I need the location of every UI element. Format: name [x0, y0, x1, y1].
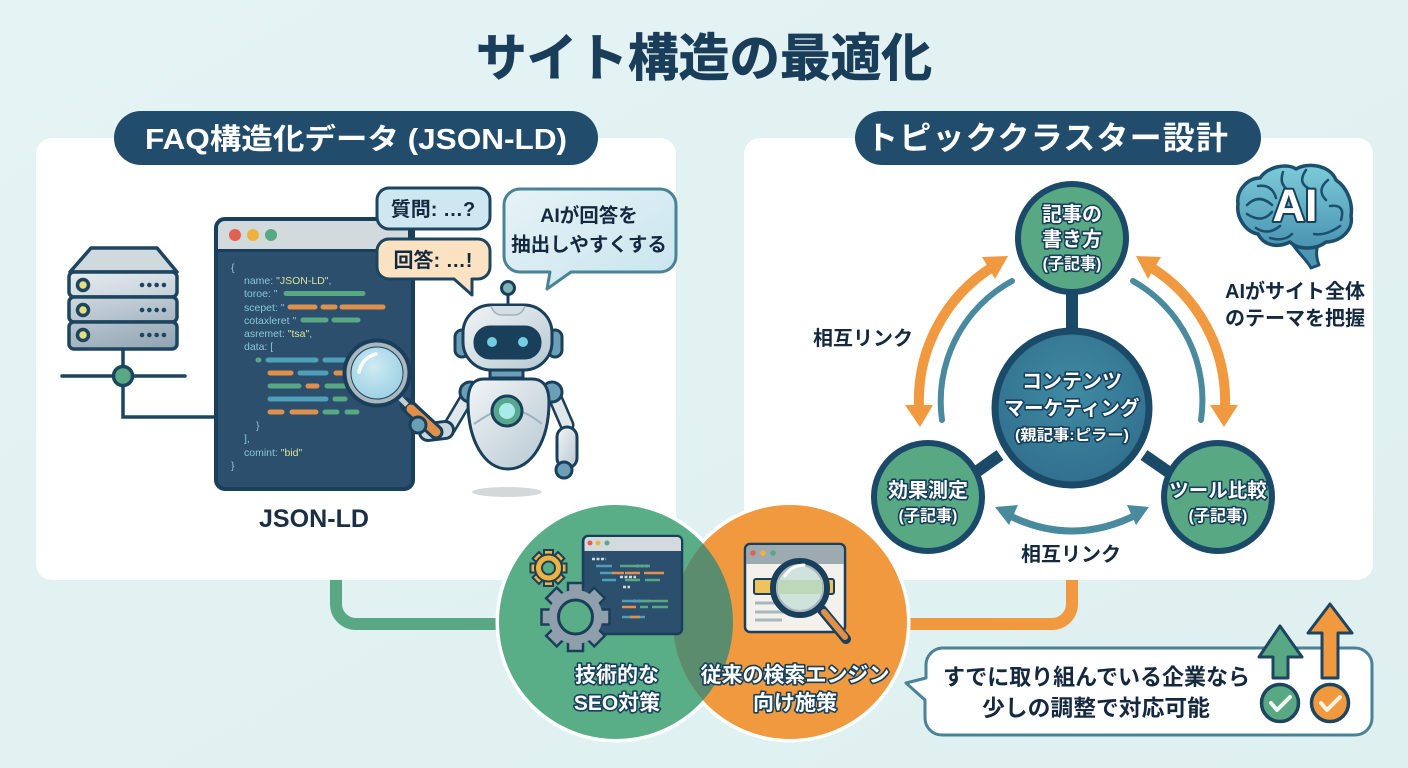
- heading pill: topic cluster: [855, 111, 1261, 165]
- panel: topic cluster design: [744, 111, 1373, 580]
- node: left child article: 効果測定: [888, 479, 968, 502]
- venn overlap: [674, 544, 733, 700]
- node: center pillar: コンテンツ: [1022, 371, 1122, 393]
- venn label: traditional search: 向け施策: [753, 692, 837, 715]
- icon: green up arrow: [1259, 626, 1302, 678]
- text: AI grasps site theme: のテーマを把握: [1225, 307, 1365, 330]
- bubble: question: 質問: …?: [391, 198, 475, 221]
- node: left child article: [874, 443, 982, 551]
- code text: [231, 262, 331, 472]
- venn halo: [496, 502, 910, 742]
- network lines and node: [62, 349, 216, 417]
- node: top child article: (子記事): [1043, 254, 1101, 273]
- node: right child article: (子記事): [1189, 506, 1247, 525]
- code text: comint: "bid": [244, 447, 303, 459]
- connector: green: [336, 580, 510, 624]
- code text: name: "JSON-LD",: [244, 275, 331, 287]
- icon: small gear: [530, 550, 566, 586]
- node: top child article: 記事の: [1042, 203, 1102, 226]
- arrow: orange right: [1136, 256, 1238, 427]
- bubble: AI extracts answers: [504, 189, 676, 289]
- bubble: answer: [377, 239, 490, 295]
- connector: orange: [900, 580, 1072, 624]
- robot ears: [455, 330, 562, 357]
- robot body: [468, 379, 549, 469]
- code text: data: [: [244, 341, 273, 353]
- code text: {: [231, 262, 235, 274]
- code text: }: [231, 460, 235, 472]
- venn circle: green: [499, 505, 733, 739]
- icon: robot: [449, 282, 577, 497]
- robot head: [463, 305, 552, 370]
- code text: cotaxleret ": [244, 315, 296, 327]
- robot visor: [475, 327, 540, 358]
- node: center pillar: マーケティング: [1004, 396, 1140, 420]
- icon: large gear: [542, 583, 610, 651]
- code text: scepet: ": [244, 302, 285, 314]
- bubble: answer: 回答: …!: [394, 248, 472, 272]
- code text: }: [256, 420, 260, 432]
- node: right child article: [1164, 443, 1272, 551]
- robot left arm: [449, 382, 480, 428]
- callout: minor adjustment: [906, 604, 1372, 735]
- text: AI grasps site theme: AIがサイト全体: [1225, 279, 1365, 303]
- panel: FAQ structured data: [36, 111, 676, 580]
- icon: server: [69, 248, 177, 349]
- code text: ],: [244, 433, 250, 445]
- bubble: AI extracts answers: AIが回答を: [540, 204, 638, 227]
- arc: teal left: [941, 281, 1012, 420]
- robot shadow: [472, 487, 542, 497]
- venn label: traditional search: [700, 664, 890, 715]
- icon: orange up arrow: [1308, 604, 1352, 678]
- robot right arm: [542, 382, 577, 478]
- robot chest core: [474, 396, 542, 426]
- arc: teal right: [1133, 281, 1202, 420]
- venn label: technical SEO: 技術的な: [575, 663, 659, 687]
- venn label: technical SEO: SEO対策: [574, 692, 660, 715]
- label: JSON-LD: JSON-LD: [259, 505, 369, 533]
- venn circle: orange: [673, 505, 907, 739]
- venn diagram: [496, 502, 910, 742]
- title: サイト構造の最適化: [476, 30, 932, 87]
- code bars: [258, 294, 383, 412]
- panel background: right: [744, 138, 1373, 580]
- panel background: left: [36, 138, 676, 580]
- code window: [216, 219, 413, 489]
- heading pill: topic cluster: トピッククラスター設計: [866, 120, 1228, 156]
- node: center pillar: [995, 331, 1149, 485]
- node: right child article: ツール比較: [1169, 480, 1267, 502]
- icon: orange check: [1312, 684, 1348, 722]
- heading pill: FAQ: FAQ構造化データ (JSON-LD): [145, 122, 567, 156]
- callout text: 少しの調整で対応可能: [982, 696, 1210, 721]
- robot antenna: [502, 282, 514, 305]
- label: mutual link bottom: 相互リンク: [1021, 543, 1121, 566]
- node: center pillar: (親記事:ピラー): [1015, 426, 1129, 444]
- code text: asremet: "tsa",: [244, 328, 312, 340]
- node: top child article: [1018, 184, 1126, 292]
- icon: AI brain: AI: [1272, 180, 1318, 231]
- callout text: [943, 665, 1250, 721]
- icon: magnifier: [347, 343, 445, 433]
- icon: AI brain: [1238, 165, 1351, 268]
- arrow: orange left: [905, 256, 1008, 427]
- callout text: すでに取り組んでいる企業なら: [943, 665, 1250, 690]
- text: AI grasps site theme: [1225, 279, 1365, 330]
- icon: green check: [1262, 684, 1298, 722]
- label: mutual link left: 相互リンク: [813, 327, 913, 350]
- node: top child article: 書き方: [1042, 228, 1102, 251]
- node: left child article: (子記事): [899, 506, 957, 525]
- robot neck: [490, 370, 523, 378]
- bubble: question: [377, 188, 490, 229]
- arrow: teal bottom: [995, 505, 1149, 531]
- icon: browser with magnifier: [745, 544, 846, 639]
- icon: code window small: [583, 536, 682, 634]
- bubble: AI extracts answers: 抽出しやすくする: [511, 234, 667, 256]
- venn label: traditional search: 従来の検索エンジン: [700, 664, 890, 687]
- venn label: technical SEO: [574, 663, 660, 715]
- code text: toroe: ": [244, 288, 278, 300]
- heading pill: FAQ: [114, 111, 598, 165]
- connector between bubbles: [408, 228, 413, 240]
- spokes: [965, 290, 1180, 480]
